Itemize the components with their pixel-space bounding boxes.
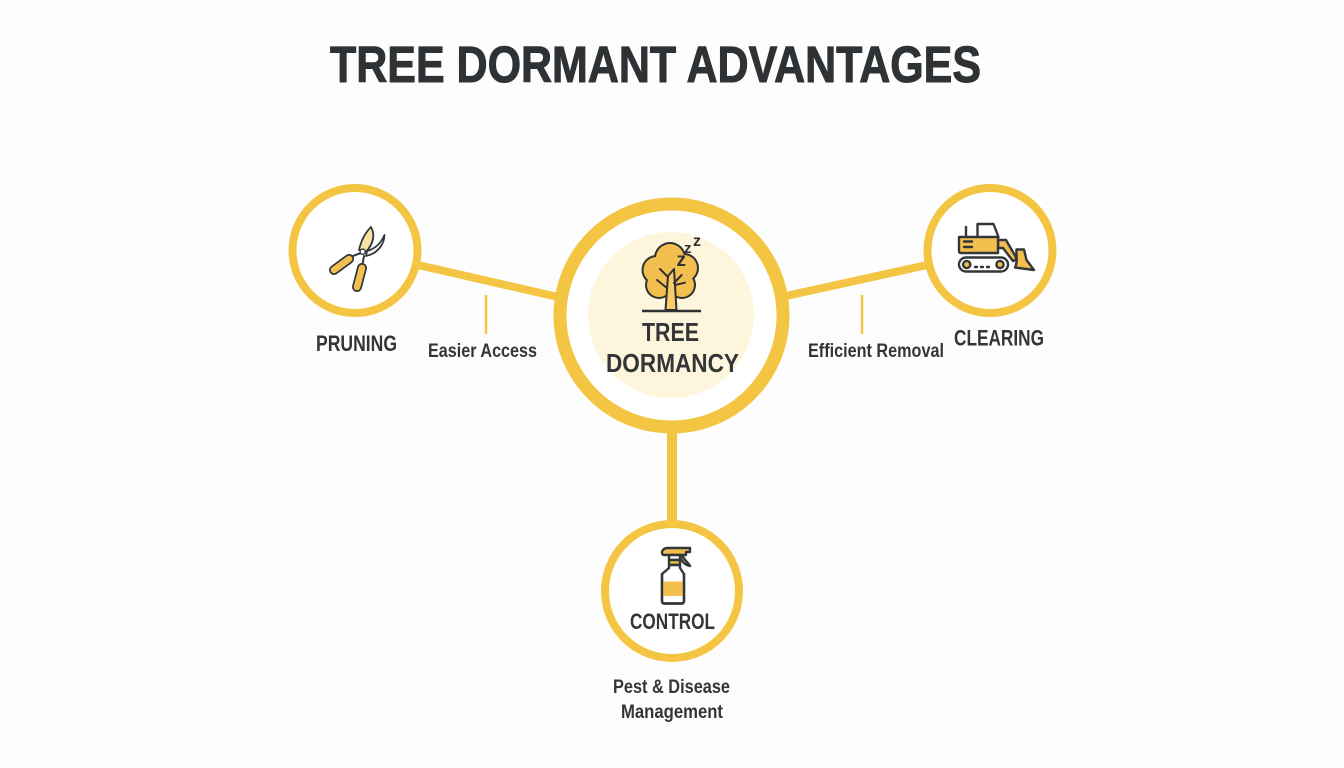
panel: pruning node bbox=[292, 188, 418, 356]
text block: pest and disease management: Pest & Disease bbox=[613, 676, 730, 698]
label: tree dormancy bbox=[606, 317, 739, 378]
text block: pest and disease management bbox=[613, 676, 730, 723]
icon: spray bottle bbox=[662, 548, 690, 604]
icon: sleeping tree bbox=[642, 233, 701, 311]
label: tree dormancy: TREE bbox=[642, 317, 699, 347]
panel: clearing node bbox=[928, 188, 1052, 350]
label: tree dormancy: DORMANCY bbox=[606, 348, 739, 378]
title: TREE DORMANT ADVANTAGES bbox=[330, 36, 981, 93]
icon: sleeping tree: z bbox=[693, 233, 701, 250]
label: easier access: Easier Access bbox=[428, 340, 537, 362]
text block: pest and disease management: Management bbox=[621, 701, 723, 723]
label: control: CONTROL bbox=[630, 609, 715, 634]
connectors bbox=[418, 265, 927, 524]
icon: pruning shears bbox=[334, 227, 384, 287]
panel: central tree dormancy node bbox=[560, 204, 783, 427]
label: efficient removal: Efficient Removal bbox=[808, 340, 944, 362]
icon: bulldozer bbox=[959, 224, 1034, 272]
panel: control node bbox=[605, 524, 739, 658]
icon: sleeping tree: z bbox=[676, 250, 686, 271]
label: pruning: PRUNING bbox=[316, 331, 397, 356]
label: clearing: CLEARING bbox=[954, 326, 1044, 350]
icon: sleeping tree: z bbox=[684, 240, 692, 257]
